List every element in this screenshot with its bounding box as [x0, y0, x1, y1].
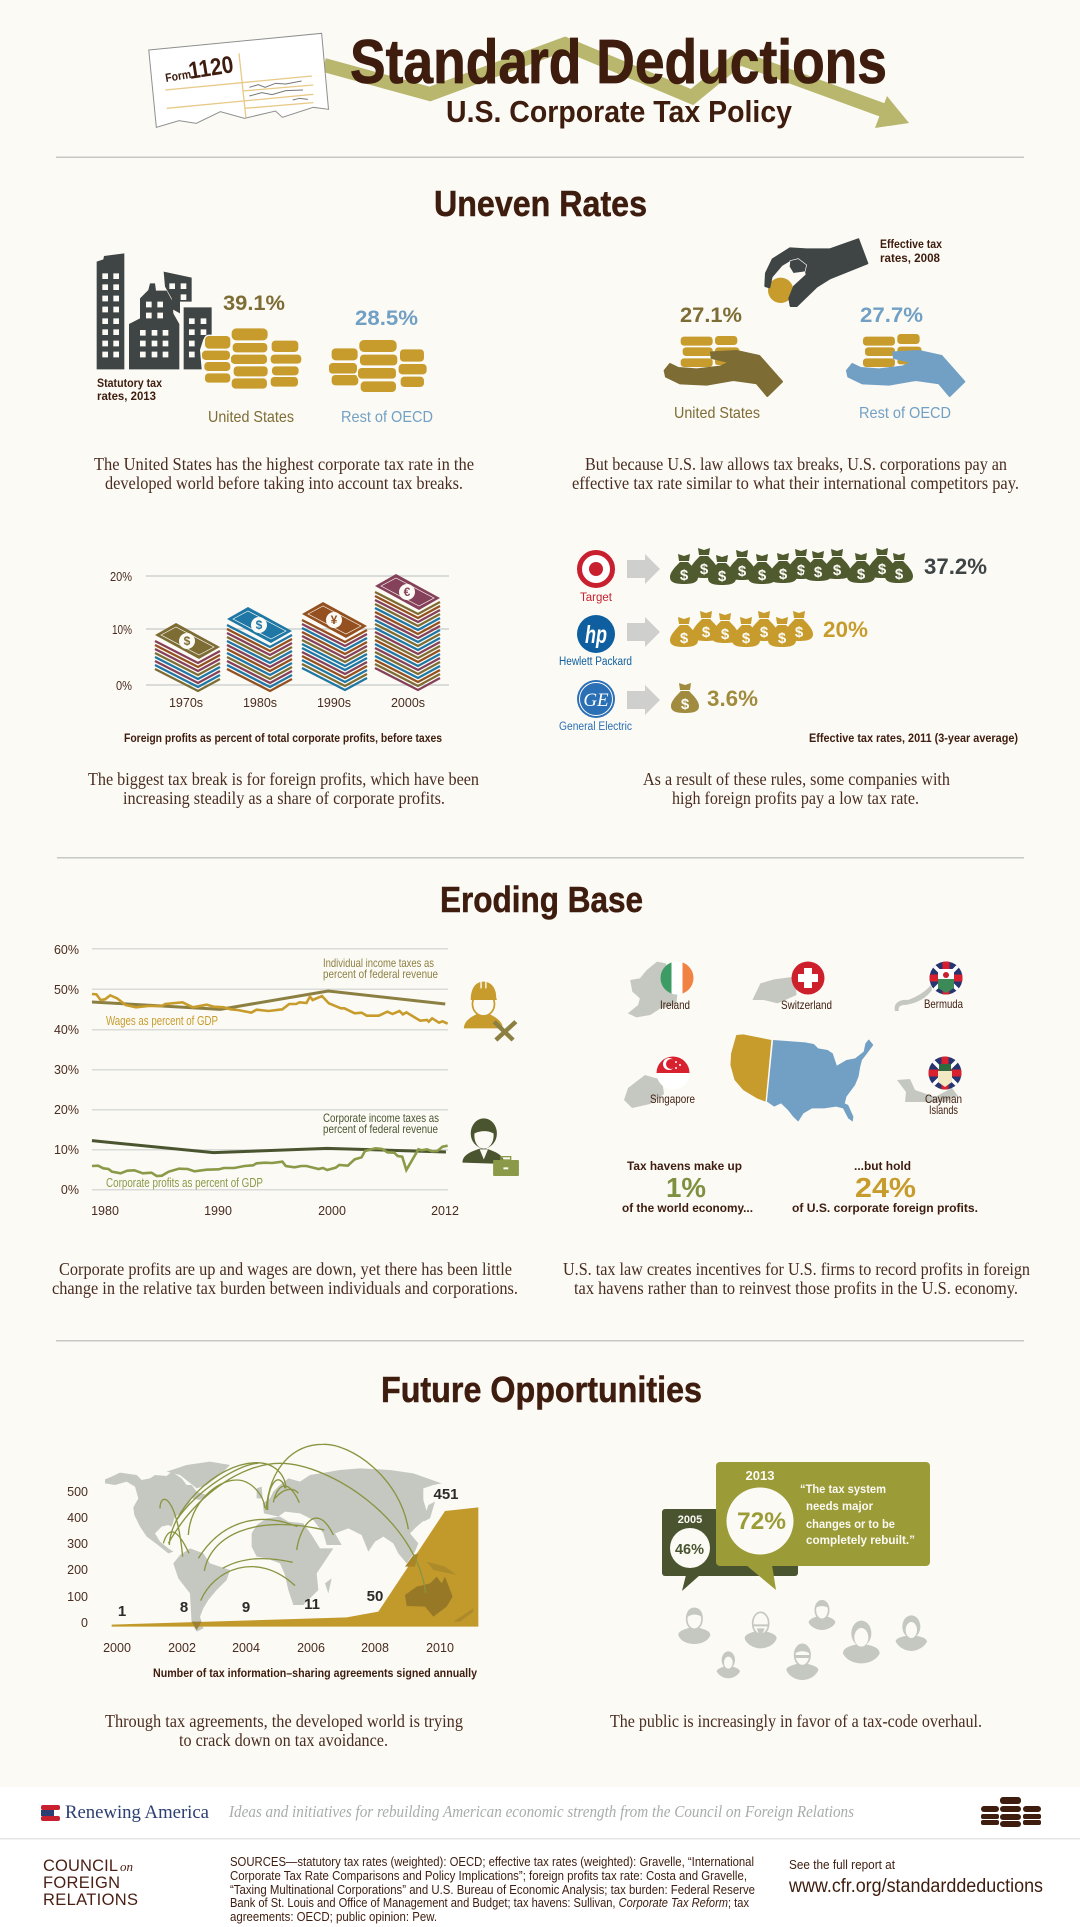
text: sources: agreements: OECD; public opinion: Pew.: [230, 1910, 437, 1924]
chart: income taxes, wages, corporate profits: 50%: [54, 983, 79, 997]
title: Standard Deductions: [350, 28, 887, 97]
text: sources: “Taxing Multinational Corporations” and U.S. Bureau of Economic Analysis; tax burden: Federal Reserve: [230, 1883, 755, 1897]
icon: form 1120: [149, 33, 329, 127]
speech bubble: 2005: 46%: [675, 1541, 704, 1558]
icon: businessman with briefcase: [462, 1118, 519, 1176]
text: tax law incentives: [563, 1259, 1030, 1298]
chart: tax information-sharing agreements over world map: 500: [67, 1485, 88, 1499]
map: united states: [730, 1034, 873, 1122]
icons: public crowd: [678, 1601, 927, 1680]
speech bubble: 2013: [716, 1462, 930, 1590]
speech bubble: 2013: 72%: [737, 1508, 786, 1535]
stat: twenty-four percent of profits: of U.S. corporate foreign profits.: [792, 1201, 978, 1215]
logo: council on foreign relations: RELATIONS: [43, 1891, 138, 1909]
text: tax law incentives: U.S. tax law creates incentives for U.S. firms to record profits in foreign: [563, 1259, 1030, 1279]
chart: income taxes, wages, corporate profits: 10%: [54, 1143, 79, 1157]
money bags: hewlett packard: $: [680, 630, 689, 647]
map: tax havens and united states: [624, 961, 963, 1122]
speech bubble: 2005: 2005: [678, 1514, 702, 1526]
icon: city buildings: [97, 253, 212, 369]
chart: foreign profits money stacks: 10%: [112, 623, 132, 637]
stat: one percent of world economy: Tax havens make up: [627, 1159, 742, 1173]
speech bubble: 2013: “The tax system: [800, 1482, 886, 1496]
icon: construction worker: [464, 982, 516, 1040]
caption: statutory tax rates: Statutory tax: [97, 376, 162, 390]
logo: council on foreign relations: [43, 1857, 138, 1909]
caption: foreign profits: Foreign profits as percent of total corporate profits, before taxes: [124, 731, 442, 745]
haven: switzerland: Switzerland: [781, 998, 832, 1012]
money bags: target: $: [895, 566, 904, 583]
haven: ireland: [628, 961, 694, 1017]
stack 1970s: $: [184, 634, 191, 648]
icon: coin stack footer: [981, 1797, 1041, 1827]
chart: tax information-sharing agreements over world map: 2002: [168, 1641, 196, 1655]
money bags: hewlett packard: $: [742, 630, 751, 647]
text: corporate profits up: Corporate profits are up and wages are down, yet there has been little: [59, 1259, 512, 1279]
chart: tax information-sharing agreements over world map: 100: [67, 1590, 88, 1604]
logo: hewlett packard: [559, 615, 632, 668]
stack 1990s: ¥: [331, 613, 338, 627]
logo: target: [580, 552, 613, 604]
person 2: [745, 1612, 777, 1648]
label: rest of oecd: Rest of OECD: [341, 409, 433, 426]
icon: form 1120: Form: [164, 67, 192, 85]
chart: foreign profits money stacks: 0%: [116, 679, 132, 693]
text: companies pay low rate: As a result of these rules, some companies with: [643, 769, 950, 789]
chart: foreign profits money stacks: 1980s: [243, 696, 277, 710]
icon: hand with coins rest of oecd: [847, 334, 964, 396]
money bags: target: $: [833, 562, 842, 579]
text: sources: Bank of St. Louis and Office of Management and Budget; tax havens: Sullivan, Corporate Tax Reform; tax: [230, 1896, 750, 1910]
text: sources: SOURCES—statutory tax rates (weighted): OECD; effective tax rates (weighted): Gravelle, “International: [230, 1855, 754, 1869]
text: see the full report: See the full report at: [789, 1857, 895, 1872]
money bags: target: $: [718, 568, 727, 585]
chart: foreign profits money stacks: 1970s: [169, 696, 203, 710]
stack 1980s: $: [256, 618, 263, 632]
logo: council on foreign relations: FOREIGN: [43, 1874, 120, 1892]
money bags: target: $: [857, 566, 866, 583]
money bags: target: $: [878, 561, 887, 578]
chart: foreign profits money stacks: 2000s: [391, 696, 425, 710]
person 7: [786, 1644, 818, 1680]
text: highest corporate rate: [94, 454, 474, 493]
money bags: target: $: [738, 563, 747, 580]
icon: hand dropping coin: [765, 239, 867, 306]
icon: coin stacks rest of oecd: [328, 339, 427, 393]
money bags: hewlett packard: $: [721, 626, 730, 643]
caption: statutory tax rates: rates, 2013: [97, 389, 156, 403]
money bags: hewlett packard: $: [795, 624, 804, 641]
text: tax agreements: Through tax agreements, the developed world is trying: [105, 1711, 463, 1731]
icon: coin stacks united states: [201, 328, 302, 389]
header arrow: [324, 44, 909, 128]
speech bubble: 2013: completely rebuilt.”: [806, 1533, 915, 1547]
haven: singapore: Singapore: [650, 1092, 695, 1106]
person 3: [809, 1601, 835, 1630]
label: united states: United States: [208, 409, 294, 426]
haven: bermuda: [895, 961, 963, 1011]
money bags: hewlett packard: [670, 611, 813, 647]
chart: foreign profits money stacks: [110, 570, 449, 710]
text: see the full report: [788, 1857, 1043, 1897]
money bags: target: $: [758, 567, 767, 584]
text: biggest tax break: [88, 769, 479, 808]
chart: tax information-sharing agreements over world map: 0: [81, 1616, 88, 1630]
chart: tax information-sharing agreements over world map: 451: [433, 1486, 459, 1503]
money bag: general electric: [671, 683, 699, 713]
chart: tax information-sharing agreements over world map: [67, 1444, 478, 1655]
logo: general electric: [559, 680, 632, 733]
caption: effective tax rates: rates, 2008: [880, 251, 940, 265]
text: sources: Corporate Tax Rate Comparisons and Policy Implications”; foreign profits tax rate: Costa and Gravelle,: [230, 1869, 747, 1883]
icon: form 1120: 1120: [187, 51, 235, 85]
icon: hand with coins united states: [665, 336, 782, 396]
person 6: [717, 1651, 740, 1678]
stat: twenty-four percent of profits: [792, 1159, 978, 1215]
money bags: hewlett packard: $: [702, 624, 711, 641]
chart: tax information-sharing agreements over world map: 8: [180, 1599, 188, 1616]
chart: tax information-sharing agreements over world map: 300: [67, 1537, 88, 1551]
effective rate rest of oecd: 27.7%: [860, 304, 923, 327]
chart: tax information-sharing agreements over world map: 9: [242, 1599, 250, 1616]
stack 2000s: €: [404, 585, 411, 599]
money bags: hewlett packard: $: [760, 624, 769, 641]
money bags: target: $: [779, 566, 788, 583]
chart: tax information-sharing agreements over world map: 11: [304, 1596, 320, 1613]
caption: effective tax rates: Effective tax: [880, 237, 942, 251]
chart: income taxes, wages, corporate profits: Corporate income taxes as: [323, 1111, 439, 1125]
chart: income taxes, wages, corporate profits: 2012: [431, 1204, 459, 1218]
chart: tax information-sharing agreements over world map: 2000: [103, 1641, 131, 1655]
chart: income taxes, wages, corporate profits: 2000: [318, 1204, 346, 1218]
caption: statutory tax rates: [97, 376, 162, 403]
haven: cayman islands: Islands: [929, 1103, 958, 1117]
value: target: 37.2%: [924, 554, 987, 579]
chart: income taxes, wages, corporate profits: 1990: [204, 1204, 232, 1218]
stat: one percent of world economy: 1%: [666, 1172, 706, 1203]
text: highest corporate rate: The United States has the highest corporate tax rate in the: [94, 454, 474, 474]
world map: [105, 1462, 442, 1632]
chart: income taxes, wages, corporate profits: 40%: [54, 1023, 79, 1037]
line: corporate income taxes: [92, 1141, 446, 1153]
logo: council on foreign relations: COUNCIL: [43, 1857, 118, 1875]
logo: hewlett packard: Hewlett Packard: [559, 656, 632, 668]
money bags: hewlett packard: $: [778, 630, 787, 647]
stack 1990s: [302, 602, 367, 690]
logo: renewing america: Renewing America: [65, 1802, 210, 1823]
chart: tax information-sharing agreements over world map: 2010: [426, 1641, 454, 1655]
chart: tax information-sharing agreements over world map: 2006: [297, 1641, 325, 1655]
footer band: [0, 1787, 1080, 1927]
effective rate united states: 27.1%: [680, 304, 742, 327]
label: rest of oecd effective: Rest of OECD: [859, 405, 951, 422]
chart: tax information-sharing agreements over world map: 50: [367, 1588, 383, 1605]
heading: eroding base: Eroding Base: [440, 879, 643, 920]
money bags: target: $: [797, 562, 806, 579]
haven: cayman islands: [897, 1056, 962, 1117]
chart: income taxes, wages, corporate profits: Corporate profits as percent of GDP: [106, 1176, 263, 1190]
money bags: target: [670, 548, 913, 585]
logo: general electric: General Electric: [559, 721, 632, 733]
text: effective rate similar: effective tax rate similar to what their international competitors pay.: [572, 473, 1019, 493]
stack 1970s: [155, 623, 220, 691]
heading: uneven rates: Uneven Rates: [434, 183, 647, 224]
chart: tax information-sharing agreements over world map: 200: [67, 1563, 88, 1577]
haven: switzerland: [752, 962, 832, 1012]
text: biggest tax break: increasing steadily as a share of corporate profits.: [123, 788, 445, 808]
area: agreements signed: [112, 1507, 478, 1627]
chart: income taxes, wages, corporate profits: [54, 943, 459, 1218]
haven: cayman islands: Cayman: [925, 1092, 962, 1106]
person 4: [843, 1621, 880, 1663]
subtitle: U.S. Corporate Tax Policy: [446, 94, 793, 129]
line: wages: [92, 994, 448, 1024]
chart: foreign profits money stacks: 1990s: [317, 696, 351, 710]
person 5: [896, 1615, 927, 1651]
haven: ireland: Ireland: [660, 998, 690, 1012]
logo: target: Target: [580, 592, 613, 604]
text: corporate profits up: [52, 1259, 518, 1298]
chart: foreign profits money stacks: 20%: [110, 570, 132, 584]
text: public favors overhaul: The public is increasingly in favor of a tax-code overhaul.: [610, 1711, 982, 1731]
chart: tax information-sharing agreements over world map: 2004: [232, 1641, 260, 1655]
text: companies pay low rate: high foreign profits pay a low tax rate.: [672, 788, 919, 808]
australia under area: [405, 1577, 453, 1617]
caption: effective tax rates 2011: Effective tax rates, 2011 (3-year average): [809, 731, 1018, 745]
arrows: company to rate: [627, 554, 660, 715]
chart: income taxes, wages, corporate profits: 20%: [54, 1103, 79, 1117]
chart: tax information-sharing agreements over world map: 2008: [361, 1641, 389, 1655]
speech bubble: 2013: needs major: [806, 1499, 873, 1513]
chart: income taxes, wages, corporate profits: Wages as percent of GDP: [106, 1014, 218, 1028]
line: corporate profits: [92, 1146, 448, 1176]
chart: income taxes, wages, corporate profits: percent of federal revenue: [323, 1122, 438, 1136]
text: tax law incentives: tax havens rather than to reinvest those profits in the U.S. economy.: [574, 1278, 1018, 1298]
chart: tax information-sharing agreements over world map: 400: [67, 1511, 88, 1525]
chart: income taxes, wages, corporate profits: 60%: [54, 943, 79, 957]
text: sources: [230, 1855, 755, 1924]
text: tax agreements: [105, 1711, 463, 1750]
value: hewlett packard: 20%: [823, 617, 868, 642]
line: individual income taxes: [92, 991, 445, 1009]
label: united states effective: United States: [674, 405, 760, 422]
stat: one percent of world economy: of the world economy...: [622, 1201, 753, 1215]
statutory rate rest of oecd: 28.5%: [355, 307, 418, 330]
trade arcs: [160, 1444, 426, 1601]
text: see the full report: www.cfr.org/standarddeductions: [788, 1876, 1043, 1897]
haven: bermuda: Bermuda: [924, 997, 963, 1011]
chart: tax information-sharing agreements over world map: 1: [118, 1603, 126, 1620]
money bag: general electric: $: [681, 696, 690, 713]
speech bubble: 2013: changes or to be: [806, 1517, 895, 1531]
text: effective rate similar: [572, 454, 1019, 493]
logo: council on foreign relations: on: [120, 1859, 133, 1874]
speech bubble: 2013: 2013: [746, 1468, 774, 1483]
caption: agreements signed annually: Number of tax information–sharing agreements signed annually: [153, 1666, 477, 1680]
speech bubble: 2005: [662, 1509, 798, 1591]
statutory rate united states: 39.1%: [223, 292, 285, 315]
stat: twenty-four percent of profits: 24%: [855, 1172, 916, 1203]
caption: effective tax rates: [880, 237, 942, 265]
haven: singapore: [624, 1056, 695, 1108]
value: general electric: 3.6%: [707, 686, 758, 711]
logo: general electric: GE: [583, 690, 609, 711]
tagline: Ideas and initiatives for rebuilding American economic strength from the Council on Foreign Relations: [228, 1802, 854, 1821]
text: effective rate similar: But because U.S. law allows tax breaks, U.S. corporations pay an: [585, 454, 1007, 474]
text: companies pay low rate: [643, 769, 950, 808]
heading: future opportunities: Future Opportunities: [381, 1369, 702, 1410]
chart: income taxes, wages, corporate profits: 1980: [91, 1204, 119, 1218]
text: corporate profits up: change in the relative tax burden between individuals and corporations.: [52, 1278, 518, 1298]
text: biggest tax break: The biggest tax break is for foreign profits, which have been: [88, 769, 479, 789]
text: tax agreements: to crack down on tax avoidance.: [179, 1730, 388, 1750]
stack 2000s: [375, 574, 440, 690]
logo: hewlett packard: hp: [585, 621, 607, 649]
person 1: [678, 1608, 710, 1644]
chart: income taxes, wages, corporate profits: 30%: [54, 1063, 79, 1077]
money bags: target: $: [680, 567, 689, 584]
chart: income taxes, wages, corporate profits: percent of federal revenue: [323, 967, 438, 981]
chart: income taxes, wages, corporate profits: 0%: [61, 1183, 79, 1197]
money bags: target: $: [814, 564, 823, 581]
stack 1980s: [227, 607, 292, 691]
chart: income taxes, wages, corporate profits: Individual income taxes as: [323, 956, 434, 970]
money bags: target: $: [700, 561, 709, 578]
stat: twenty-four percent of profits: ...but hold: [854, 1159, 911, 1173]
stat: one percent of world economy: [622, 1159, 753, 1215]
text: highest corporate rate: developed world before taking into account tax breaks.: [105, 473, 463, 493]
